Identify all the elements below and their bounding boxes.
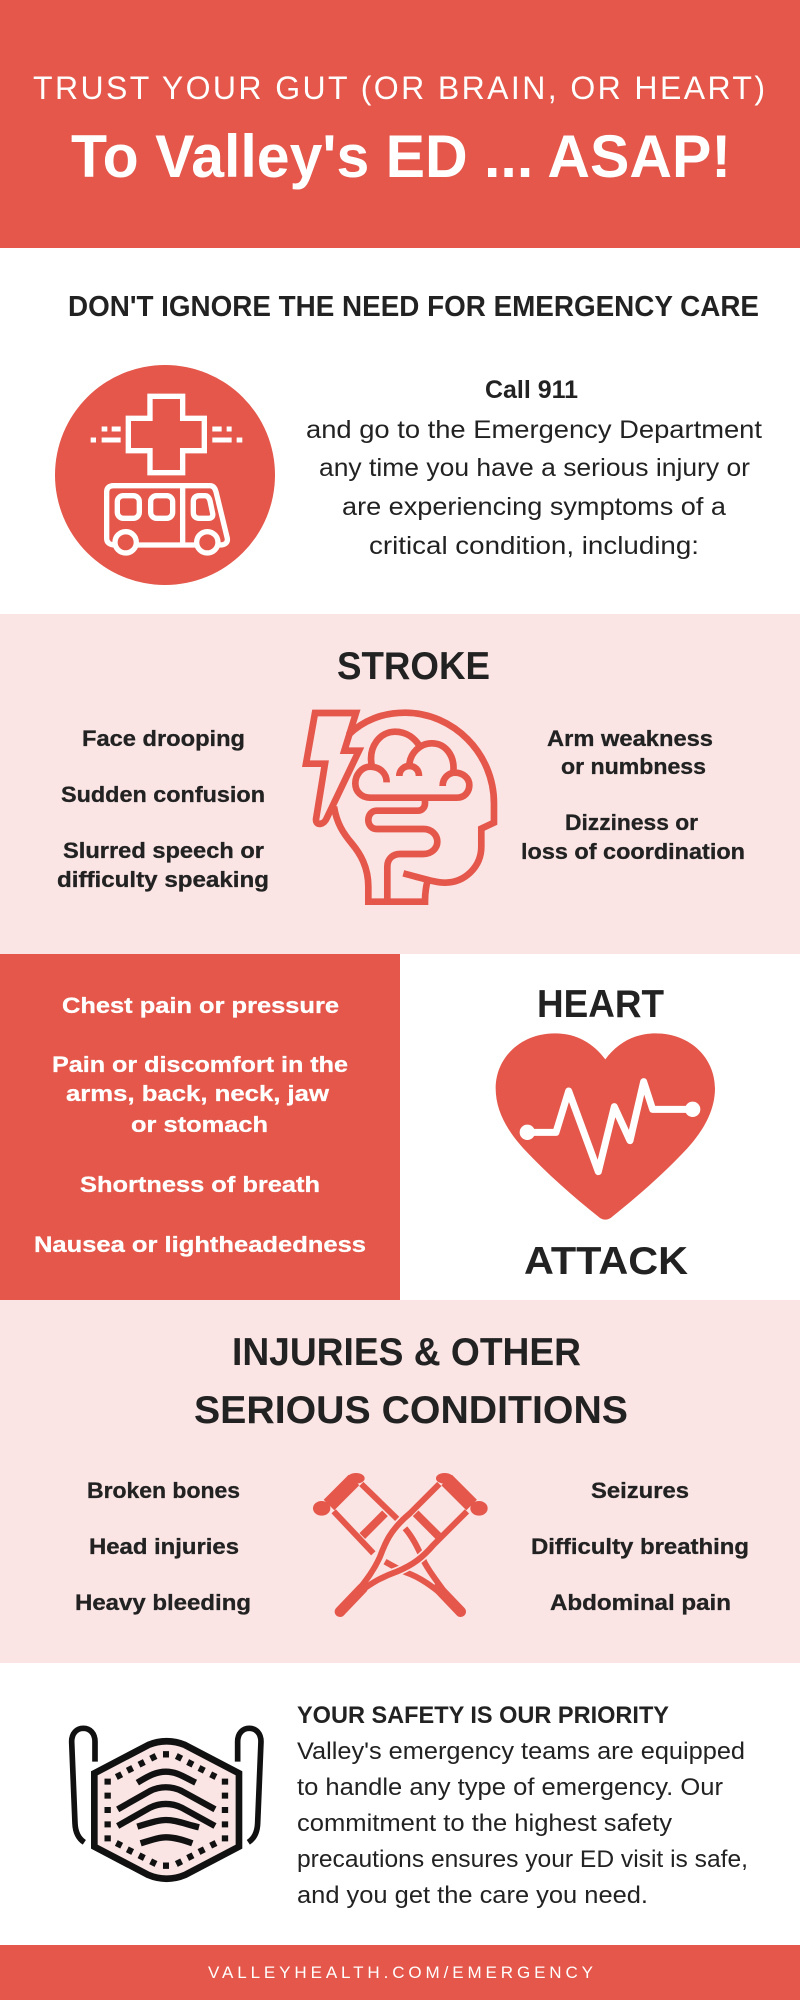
panel: heart attack symptoms: Chest pain or pressure (62, 993, 339, 1018)
panel: injuries and other conditions (0, 1300, 800, 1663)
panel: footer (0, 1945, 800, 2000)
panel: call 911 intro (0, 248, 800, 614)
panel: heart attack symptoms: arms, back, neck, jaw (66, 1081, 330, 1106)
icon: ambulance in circle (55, 365, 275, 585)
footer url: VALLEYHEALTH.COM/EMERGENCY (208, 1963, 593, 1982)
injuries list left: Broken bones (87, 1478, 240, 1503)
panel: heart attack symptoms: Nausea or lightheadedness (34, 1232, 366, 1257)
intro text: are experiencing symptoms of a (342, 493, 726, 521)
icon: heart with pulse line (496, 1033, 715, 1220)
injuries list right: Abdominal pain (550, 1590, 731, 1615)
heading: injuries: SERIOUS CONDITIONS (194, 1389, 628, 1432)
safety text: Valley's emergency teams are equipped (297, 1738, 745, 1765)
stroke symptoms left: Sudden confusion (61, 782, 265, 807)
intro text: any time you have a serious injury or (319, 454, 750, 482)
stroke symptoms right: Dizziness or (565, 810, 698, 835)
panel: header banner (0, 0, 800, 248)
safety text (297, 1702, 748, 1909)
heading: heart: HEART (537, 983, 664, 1026)
panel: stroke (0, 614, 800, 954)
intro text: and go to the Emergency Department (306, 416, 762, 444)
injuries list left: Heavy bleeding (75, 1590, 251, 1615)
panel: heart attack symptoms (0, 954, 400, 1300)
panel: heart attack graphic (400, 954, 800, 1300)
icon: face mask (72, 1728, 261, 1879)
stroke symptoms left: difficulty speaking (57, 867, 269, 892)
panel: heart attack symptoms: Pain or discomfort in the (52, 1052, 348, 1077)
panel: safety priority (0, 1663, 800, 1945)
safety text: and you get the care you need. (297, 1882, 648, 1909)
stroke symptoms left: Face drooping (82, 726, 245, 751)
heading: emergency care: DON'T IGNORE THE NEED FOR EMERGENCY CARE (68, 291, 759, 323)
stroke symptoms right (521, 726, 745, 864)
heading: stroke: STROKE (337, 645, 490, 688)
title line two: To Valley's ED ... ASAP! (71, 123, 731, 190)
panel: heart attack symptoms: Shortness of breath (80, 1172, 320, 1197)
intro text (306, 376, 762, 560)
stroke symptoms left: Slurred speech or (63, 838, 264, 863)
heading: attack: ATTACK (524, 1240, 688, 1283)
stroke symptoms right: Arm weakness (547, 726, 713, 751)
safety text: precautions ensures your ED visit is safe, (297, 1846, 748, 1873)
title line one: TRUST YOUR GUT (OR BRAIN, OR HEART) (33, 70, 765, 106)
injuries list left: Head injuries (89, 1534, 239, 1559)
icon: crossed crutches (313, 1473, 488, 1612)
injuries list right: Difficulty breathing (531, 1534, 749, 1559)
heading: injuries (194, 1331, 628, 1432)
injuries list left (75, 1478, 251, 1615)
injuries list right (531, 1478, 749, 1615)
safety text: commitment to the highest safety (297, 1810, 672, 1837)
heading: injuries: INJURIES & OTHER (232, 1331, 581, 1374)
safety text: YOUR SAFETY IS OUR PRIORITY (297, 1702, 669, 1729)
stroke symptoms left (57, 726, 269, 892)
stroke symptoms right: loss of coordination (521, 839, 745, 864)
panel: heart attack symptoms: or stomach (131, 1112, 268, 1137)
stroke symptoms right: or numbness (561, 754, 706, 779)
intro text: Call 911 (485, 376, 578, 404)
intro text: critical condition, including: (369, 532, 699, 560)
safety text: to handle any type of emergency. Our (297, 1774, 723, 1801)
injuries list right: Seizures (591, 1478, 689, 1503)
icon: head with brain and lightning bolt (306, 713, 494, 902)
